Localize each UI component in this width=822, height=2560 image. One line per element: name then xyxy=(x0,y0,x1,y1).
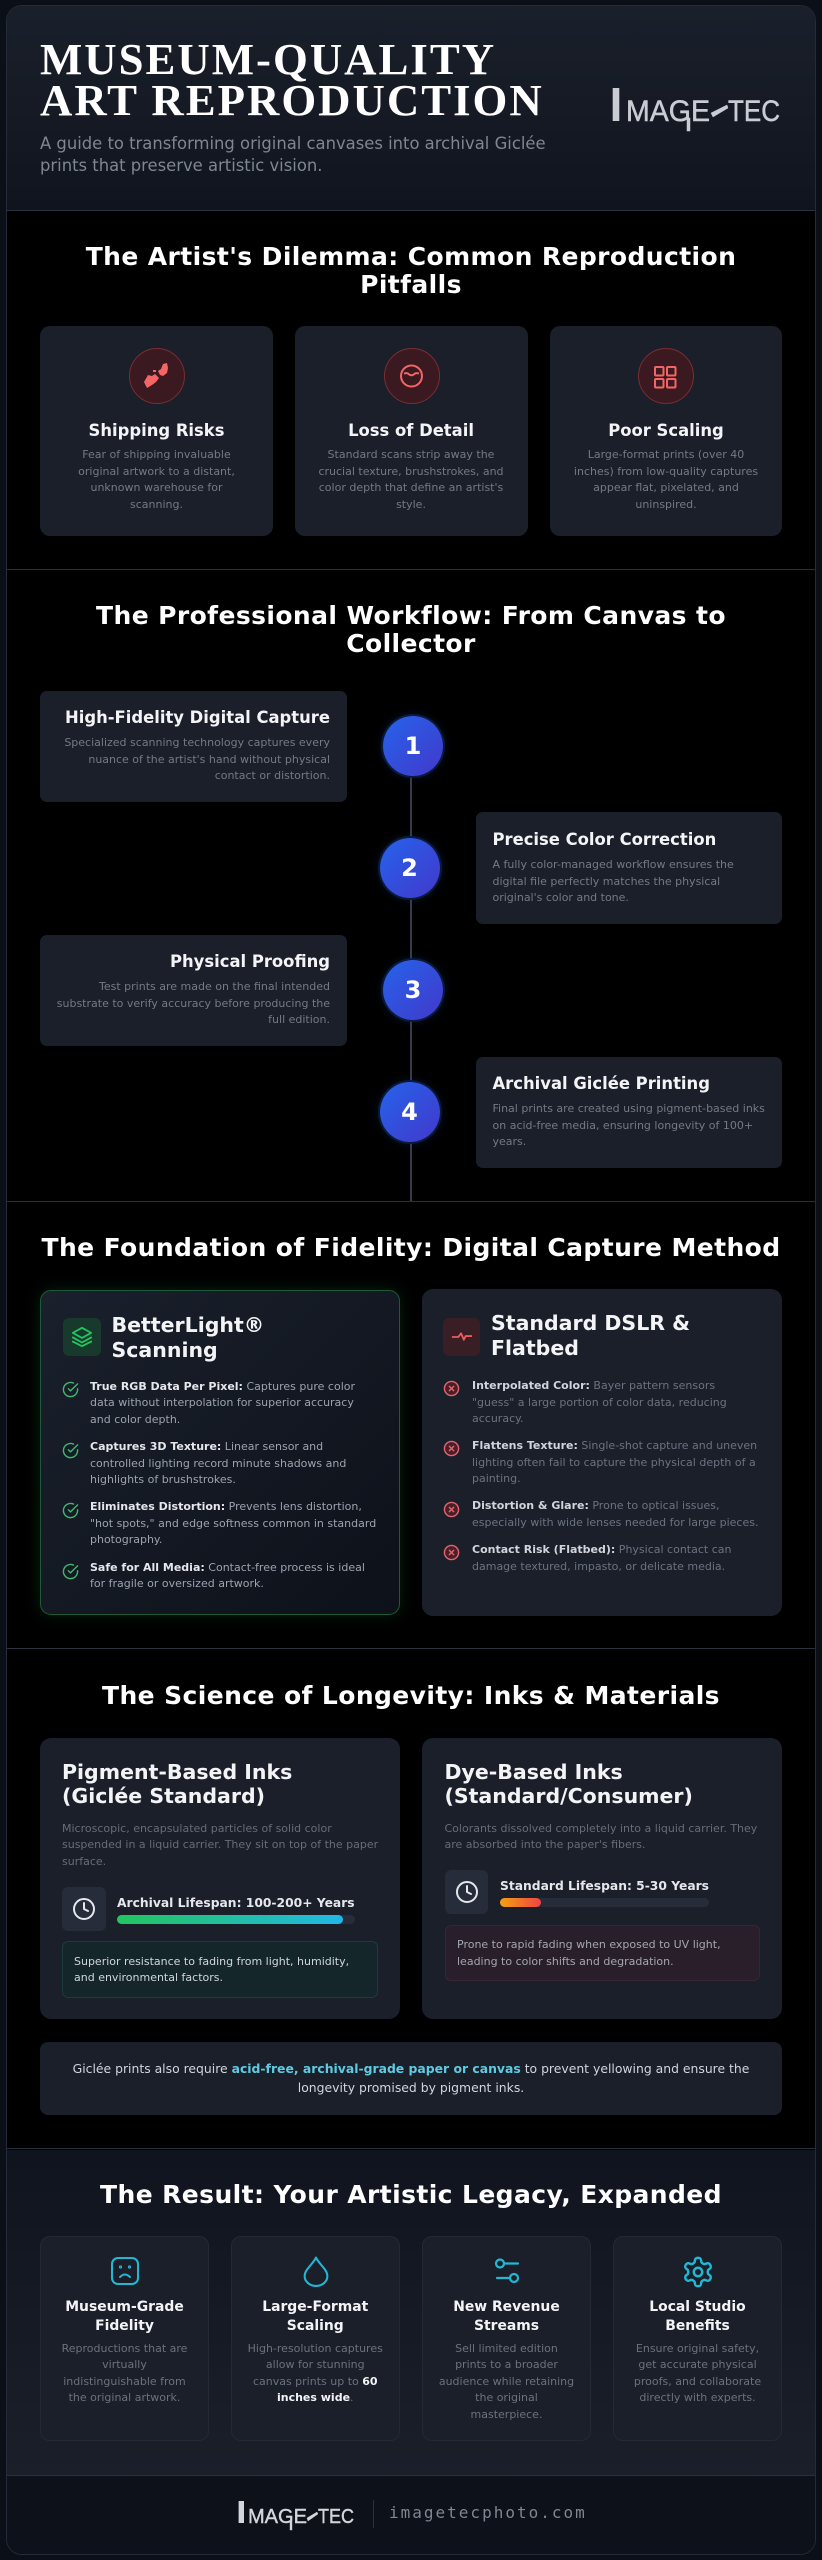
step text: full edition. xyxy=(268,1013,330,1026)
step text xyxy=(64,736,330,782)
card text: Standard scans strip away the xyxy=(328,448,494,461)
step number 2 xyxy=(380,838,440,898)
note text: Giclée prints also require acid-free, archival-grade paper or canvas to prevent yellowing and ensure the xyxy=(73,2060,749,2076)
step number 1 xyxy=(383,716,443,776)
card text: inches) from low-quality captures xyxy=(574,464,758,478)
card text: original artwork to a distant, xyxy=(78,464,235,478)
feature text xyxy=(90,1440,346,1486)
icon glyph: grid xyxy=(654,366,676,388)
card text: canvas prints up to 60 xyxy=(253,2374,378,2388)
heading: longevity: The Science of Longevity: Inks & Materials xyxy=(102,1681,720,1710)
heading: workflow: Collector xyxy=(346,628,476,658)
feature text: Eliminates Distortion: Prevents lens distortion, xyxy=(90,1500,362,1513)
ink heading xyxy=(62,1760,292,1808)
card title: Fidelity xyxy=(95,2318,154,2334)
feature text: data without interpolation for superior accuracy xyxy=(90,1396,354,1409)
card text: inches wide. xyxy=(277,2391,354,2404)
panel heading: BetterLight® xyxy=(112,1312,264,1336)
card: local studio benefits xyxy=(613,2236,782,2441)
logo: Image-Tec header: TEC xyxy=(728,95,780,128)
step 2 card xyxy=(476,812,782,924)
step title: Physical Proofing xyxy=(170,952,330,971)
note text: longevity promised by pigment inks. xyxy=(298,2080,524,2094)
x icon xyxy=(444,1440,460,1456)
step text: contact or distortion. xyxy=(215,769,330,782)
card text: Fear of shipping invaluable xyxy=(82,448,231,461)
card text: style. xyxy=(396,498,426,510)
step text: on acid-free media, ensuring longevity of 100+ xyxy=(492,1118,753,1132)
card text xyxy=(232,2340,398,2406)
step text xyxy=(492,858,734,904)
ink heading xyxy=(444,1760,693,1808)
logo: Image-Tec footer xyxy=(0,2480,822,2540)
card title: Benefits xyxy=(665,2318,730,2334)
footer divider xyxy=(373,2500,374,2528)
lifespan label: Standard Lifespan: 5-30 Years xyxy=(500,1879,709,1893)
issue text: Contact Risk (Flatbed): Physical contact can xyxy=(472,1543,731,1556)
ink description: suspended in a liquid carrier. They sit on top of the paper xyxy=(62,1838,378,1851)
footer url: imagetecphoto.com xyxy=(389,2503,587,2522)
logo: Image-Tec footer: TEC xyxy=(318,2506,354,2528)
card title: Museum-Grade xyxy=(65,2299,184,2315)
ink description: Microscopic, encapsulated particles of solid color xyxy=(62,1822,332,1834)
header panel xyxy=(7,6,815,211)
issue text: Flattens Texture: Single-shot capture and uneven xyxy=(472,1439,757,1452)
icon: sliders xyxy=(494,2257,522,2285)
subtitle xyxy=(40,134,546,175)
card text: proofs, and collaborate xyxy=(634,2374,761,2388)
icon: gear xyxy=(681,2255,715,2289)
benefit callout xyxy=(62,1941,378,1998)
card title xyxy=(423,2298,590,2337)
title: ART REPRODUCTION xyxy=(40,75,544,125)
timeline line xyxy=(410,775,412,1201)
card text: indistinguishable from xyxy=(63,2374,186,2388)
card: poor scaling xyxy=(550,326,782,536)
step text: Specialized scanning technology captures every xyxy=(64,736,330,749)
issue text: lighting often fail to capture the physical depth of a xyxy=(472,1456,756,1468)
card text: uninspired. xyxy=(635,498,697,510)
card title xyxy=(41,2298,208,2337)
card text: Sell limited edition xyxy=(455,2342,558,2354)
panel heading: Standard DSLR & xyxy=(491,1310,690,1334)
feature list xyxy=(62,1380,376,1590)
heading: dilemma xyxy=(86,242,736,298)
card text: Large-format prints (over 40 xyxy=(588,448,744,461)
step text: digital file perfectly matches the physical xyxy=(492,874,720,888)
icon: face xyxy=(111,2257,139,2285)
card title xyxy=(614,2298,781,2337)
card text: Ensure original safety, xyxy=(636,2342,759,2354)
card text: the original artwork. xyxy=(69,2391,180,2404)
heading: digital capture: The Foundation of Fidelity: Digital Capture Method xyxy=(41,1233,781,1262)
logo: Image-Tec header xyxy=(612,88,780,132)
card title xyxy=(232,2298,398,2337)
heading: workflow: The Professional Workflow: From Canvas to xyxy=(96,601,726,630)
step 4 card xyxy=(476,1056,782,1168)
icon: clock xyxy=(445,1870,488,1914)
card: new revenue streams xyxy=(422,2236,591,2441)
subtitle: prints that preserve artistic vision. xyxy=(40,156,322,175)
card text: allow for stunning xyxy=(266,2358,365,2371)
feature text xyxy=(90,1500,376,1546)
callout text xyxy=(74,1954,349,1984)
feature text: Safe for All Media: Contact-free process is ideal xyxy=(90,1560,365,1574)
card title: Large-Format xyxy=(262,2299,368,2315)
heading: dilemma: The Artist's Dilemma: Common Reproduction xyxy=(86,242,736,271)
panel: BetterLight scanning xyxy=(40,1290,400,1615)
heading: result: The Result: Your Artistic Legacy, Expanded xyxy=(100,2180,722,2209)
card text xyxy=(318,448,504,510)
icon circle xyxy=(638,348,694,404)
ink heading: Dye-Based Inks xyxy=(444,1760,623,1784)
card title: Streams xyxy=(474,2318,539,2334)
step 3 card xyxy=(40,935,347,1046)
lifespan bar fill xyxy=(500,1898,541,1907)
panel: pigment inks xyxy=(40,1738,400,2019)
icon glyph: loss of detail xyxy=(400,364,423,388)
ink description: Colorants dissolved completely into a liquid carrier. They xyxy=(444,1822,757,1834)
issue text: Interpolated Color: Bayer pattern sensors xyxy=(472,1379,715,1392)
card title: Scaling xyxy=(287,2318,344,2334)
x icon xyxy=(444,1544,460,1560)
card text xyxy=(614,2340,781,2406)
feature text: "hot spots," and edge softness common in standard xyxy=(90,1516,376,1530)
card text xyxy=(41,2340,208,2406)
step text: original's color and tone. xyxy=(492,891,629,904)
x icon xyxy=(444,1380,460,1396)
card text: High-resolution captures xyxy=(248,2342,383,2354)
card text: color depth that define an artist's xyxy=(319,481,503,494)
card: shipping risks xyxy=(40,326,273,536)
icon: pulse xyxy=(443,1318,480,1356)
callout text: Prone to rapid fading when exposed to UV light, xyxy=(457,1938,721,1951)
card: loss of detail xyxy=(294,326,528,536)
card title: Shipping Risks xyxy=(89,421,224,440)
subtitle: A guide to transforming original canvases into archival Giclée xyxy=(40,134,546,153)
check icon xyxy=(62,1442,78,1458)
step number 3: 3 xyxy=(405,976,421,1004)
panel heading: Scanning xyxy=(112,1338,218,1362)
step text: Test prints are made on the final intended xyxy=(99,980,330,993)
step text: substrate to verify accuracy before producing the xyxy=(57,996,330,1010)
callout text: leading to color shifts and degradation. xyxy=(457,1954,674,1968)
card text: crucial texture, brushstrokes, and xyxy=(318,464,504,478)
issue text: painting. xyxy=(472,1472,521,1485)
step text xyxy=(492,1102,765,1148)
ink description: surface. xyxy=(62,1854,106,1868)
footer xyxy=(7,2476,815,2554)
panel: standard DSLR and flatbed xyxy=(422,1289,782,1616)
title xyxy=(40,34,544,125)
issue text xyxy=(472,1543,731,1572)
card title: Loss of Detail xyxy=(348,421,474,440)
card text xyxy=(423,2340,590,2423)
issue text xyxy=(472,1439,757,1485)
section background: longevity xyxy=(7,1650,815,2149)
panel: dye inks xyxy=(422,1738,782,2019)
issue text: Distortion & Glare: Prone to optical issues, xyxy=(472,1499,720,1512)
logo: Image-Tec header: MAGE xyxy=(626,95,710,128)
section background: digital capture xyxy=(7,1202,815,1649)
step title: Archival Giclée Printing xyxy=(492,1074,710,1093)
card text: Reproductions that are xyxy=(62,2342,187,2354)
icon glyph: broken package xyxy=(144,363,168,388)
callout text: and environmental factors. xyxy=(74,1971,223,1984)
step text: Final prints are created using pigment-based inks xyxy=(492,1102,765,1115)
card: large-format scaling xyxy=(231,2236,400,2441)
section background: result xyxy=(7,2150,815,2476)
issue text: "guess" a large portion of color data, reducing xyxy=(472,1396,727,1408)
note text xyxy=(40,2058,782,2096)
feature text: and color depth. xyxy=(90,1412,180,1426)
step number 4: 4 xyxy=(401,1098,418,1126)
feature text: Captures 3D Texture: Linear sensor and xyxy=(90,1440,323,1453)
step 1 card xyxy=(40,691,347,802)
icon: shipping damage xyxy=(128,348,184,404)
note: paper requirement xyxy=(40,2042,782,2115)
card text: get accurate physical xyxy=(638,2358,757,2371)
card text: unknown warehouse for xyxy=(90,481,223,494)
issue text: damage textured, impasto, or delicate media. xyxy=(472,1560,725,1572)
step number 4 xyxy=(380,1082,440,1142)
lifespan bar xyxy=(117,1915,355,1924)
icon: droplet xyxy=(302,2256,330,2287)
card text: prints to a broader xyxy=(455,2358,558,2371)
section divider: workflow xyxy=(7,570,815,1202)
feature text: controlled lighting record minute shadows and xyxy=(90,1456,346,1470)
heading: workflow xyxy=(96,601,726,658)
card text: audience while retaining xyxy=(439,2374,574,2388)
title: MUSEUM-QUALITY xyxy=(40,34,496,84)
step text xyxy=(57,980,330,1026)
step text: nuance of the artist's hand without physical xyxy=(88,752,330,766)
icon: clock xyxy=(62,1887,106,1930)
feature text: True RGB Data Per Pixel: Captures pure color xyxy=(90,1380,355,1392)
ink description xyxy=(62,1822,378,1868)
step text: years. xyxy=(492,1135,526,1148)
ink heading: (Giclée Standard) xyxy=(62,1784,265,1808)
ink heading: (Standard/Consumer) xyxy=(444,1784,693,1808)
lifespan bar fill xyxy=(117,1915,343,1924)
feature text xyxy=(90,1560,365,1590)
feature text: photography. xyxy=(90,1533,162,1546)
ink description xyxy=(444,1822,757,1851)
step number 3 xyxy=(383,960,443,1020)
ink description: are absorbed into the paper's fibers. xyxy=(444,1838,646,1851)
warning callout xyxy=(445,1925,760,1981)
step text: A fully color-managed workflow ensures the xyxy=(492,858,734,871)
icon: layers xyxy=(62,1318,100,1356)
card text: scanning. xyxy=(130,498,183,510)
icon circle xyxy=(384,348,440,404)
heading: dilemma: Pitfalls xyxy=(360,270,462,298)
callout text: Superior resistance to fading from light, humidity, xyxy=(74,1954,349,1968)
step title: High-Fidelity Digital Capture xyxy=(65,708,330,727)
x icon xyxy=(444,1502,460,1518)
card text: appear flat, pixelated, and xyxy=(593,481,739,494)
check icon xyxy=(62,1502,78,1518)
logo: Image-Tec footer: MAGE xyxy=(248,2506,307,2528)
card: museum-grade fidelity xyxy=(40,2236,209,2441)
section: artist's dilemma xyxy=(7,212,815,570)
lifespan bar xyxy=(500,1898,709,1907)
card text: virtually xyxy=(102,2358,147,2371)
panel heading xyxy=(112,1312,264,1362)
lifespan label: Archival Lifespan: 100-200+ Years xyxy=(117,1896,355,1910)
step number 1: 1 xyxy=(405,732,421,760)
issue text: especially with wide lenses needed for large pieces. xyxy=(472,1516,758,1528)
feature text: for fragile or oversized artwork. xyxy=(90,1577,264,1590)
issue text xyxy=(472,1379,727,1425)
issue text: accuracy. xyxy=(472,1412,524,1425)
ink heading: Pigment-Based Inks xyxy=(62,1760,292,1784)
card title: Local Studio xyxy=(649,2299,746,2315)
issue list xyxy=(444,1379,758,1572)
step number 2: 2 xyxy=(401,854,418,882)
check icon xyxy=(62,1564,78,1580)
panel heading xyxy=(491,1310,690,1360)
card text: masterpiece. xyxy=(471,2408,542,2420)
step title: Precise Color Correction xyxy=(492,830,716,849)
check icon xyxy=(62,1382,78,1398)
panel heading: Flatbed xyxy=(491,1336,579,1360)
card title: New Revenue xyxy=(453,2299,560,2315)
card text xyxy=(574,448,758,510)
feature text: highlights of brushstrokes. xyxy=(90,1473,236,1486)
card text: the original xyxy=(475,2391,538,2404)
card text xyxy=(78,448,235,510)
card title: Poor Scaling xyxy=(608,421,724,440)
issue text xyxy=(472,1499,758,1528)
callout text xyxy=(457,1937,721,1970)
card text: directly with experts. xyxy=(639,2391,756,2404)
feature text xyxy=(90,1380,355,1426)
